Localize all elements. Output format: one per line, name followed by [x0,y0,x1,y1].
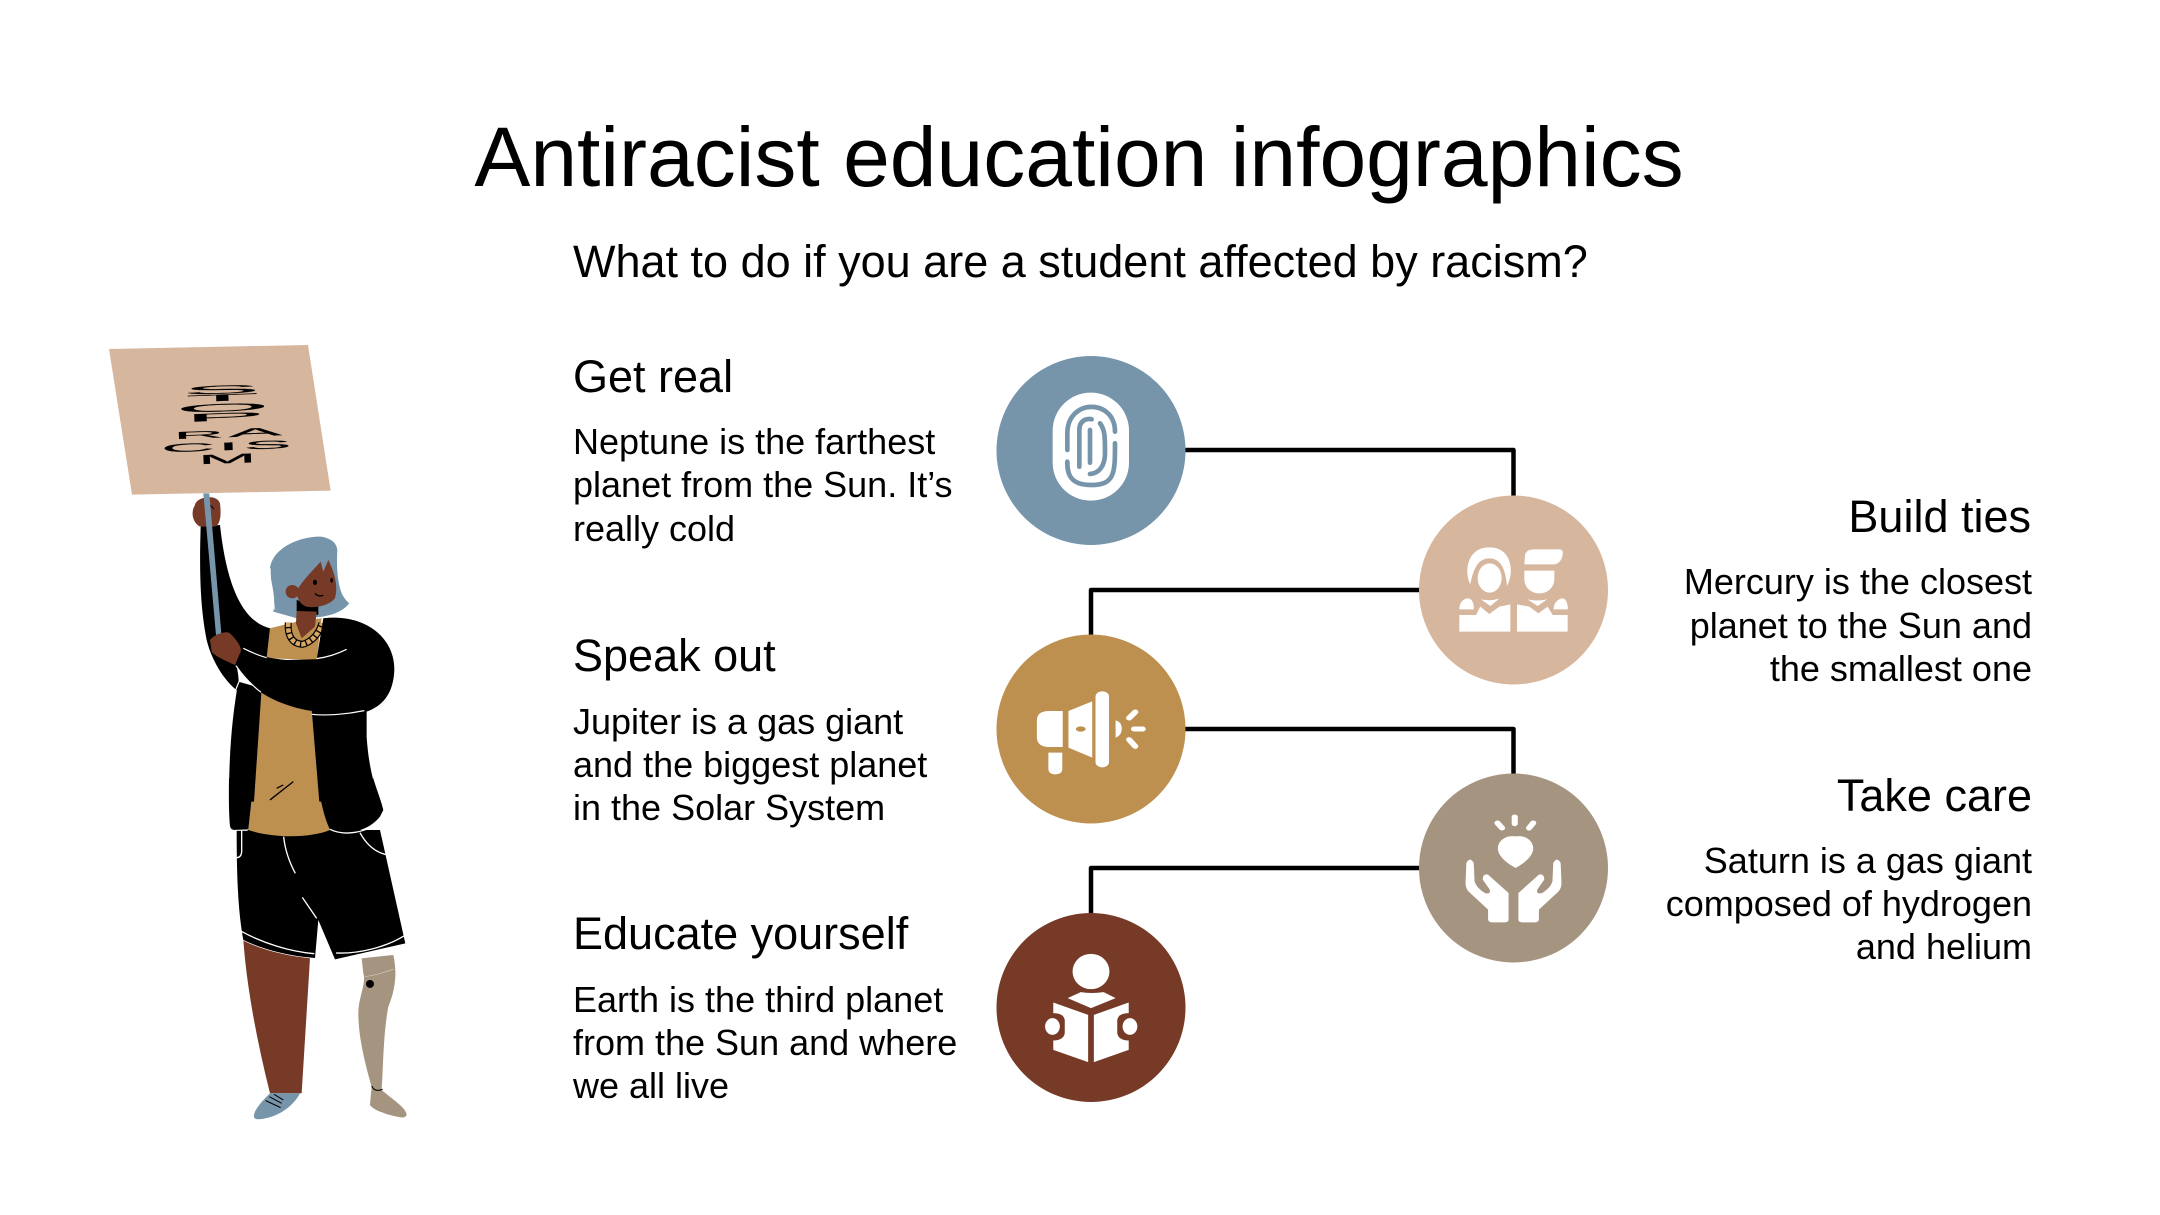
upper hand [193,497,221,527]
sign: I [217,440,240,453]
block: Get real: Get real [573,351,733,402]
sign [109,345,331,495]
lower hand [210,632,241,665]
block: Get real [573,351,953,549]
sign: A [228,425,282,440]
title: Antiracist education infographics [474,110,1684,204]
block: Get real: planet from the Sun. It’s [573,464,953,505]
pole [203,493,221,635]
block: Build ties: Build ties [1848,491,2031,542]
block: Build ties: Mercury is the closest [1684,561,2032,602]
necklace [288,623,322,644]
upper body [109,345,394,802]
block: Educate yourself: from the Sun and where [573,1022,957,1063]
neck band [297,600,318,615]
block: Take care: composed of hydrogen [1666,883,2032,924]
sign: T [186,391,259,404]
illustration: protester holding sign [109,345,407,1119]
sign: R [173,428,224,441]
torso [267,618,322,660]
icon: hands and heart circle [1419,774,1608,962]
jacket lower [229,682,262,802]
block: Speak out [573,630,927,828]
block: Speak out: in the Solar System [573,787,885,828]
lower body [229,778,407,1119]
raised arm [200,525,270,692]
block: Educate yourself: Earth is the third planet [573,979,943,1020]
block: Get real: really cold [573,508,735,549]
block: Speak out: Speak out [573,630,776,681]
block: Take care: Saturn is a gas giant [1704,840,2032,881]
block: Build ties: planet to the Sun and [1690,605,2032,646]
block: Educate yourself: we all live [572,1065,729,1106]
sign: M [198,450,257,467]
block: Build ties: the smallest one [1770,648,2032,689]
block: Educate yourself [572,908,957,1106]
subtitle: What to do if you are a student affected by racism? [573,236,1588,287]
block: Educate yourself: Educate yourself [573,908,909,959]
connector lines [1091,450,1514,920]
sign: P [185,409,265,424]
sign: S [243,437,292,452]
block: Take care [1666,770,2032,967]
sign: S [183,382,260,398]
hair [270,537,349,618]
block: Speak out: Jupiter is a gas giant [573,701,903,742]
sign: C [161,440,215,455]
block: Get real: Neptune is the farthest [573,421,935,462]
sign: O [176,400,270,415]
folded arm [236,618,394,713]
icon: two people circle [1419,496,1608,684]
icon: fingerprint circle [996,356,1186,545]
block: Build ties [1684,491,2032,689]
block: Take care: Take care [1837,770,2032,821]
icon: reading person circle [996,913,1186,1102]
block: Take care: and helium [1856,926,2032,967]
ear and face [286,585,299,598]
icon: megaphone circle [996,634,1186,824]
block: Speak out: and the biggest planet [573,744,927,785]
